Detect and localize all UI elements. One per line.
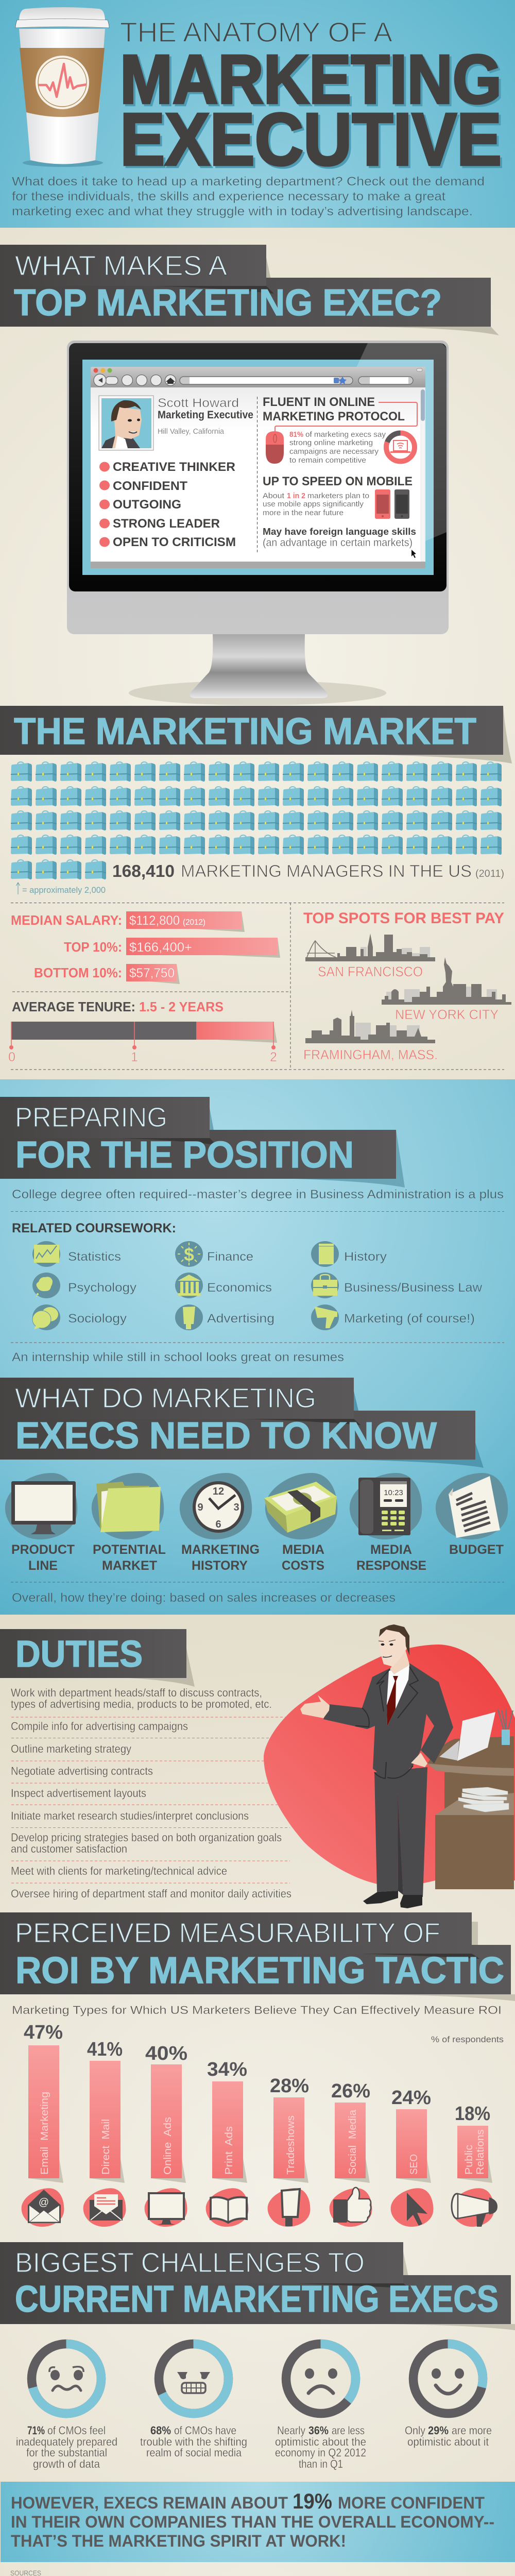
text: challenge three	[275, 2424, 366, 2470]
tactic icons row	[22, 2188, 497, 2227]
icon: clock: 3	[233, 1502, 239, 1513]
intro text: marketing exec and what they struggle with in today’s advertising landscape.	[12, 205, 473, 218]
heading: preparing for the position	[0, 1097, 405, 1188]
bar: public relations 18%: 18%	[455, 2103, 490, 2125]
text: challenge four: Only	[405, 2424, 425, 2437]
bottom 10% bar: $57,750	[129, 966, 175, 980]
bar: print ads 34%	[207, 2059, 247, 2183]
duties list: Inspect advertisement layouts	[11, 1787, 146, 1800]
course: sociology	[32, 1304, 127, 1330]
heading: preparing for the position: PREPARING	[15, 1102, 167, 1133]
label: san francisco: SAN FRANCISCO	[318, 964, 423, 979]
course: finance: $	[184, 1245, 194, 1265]
bar: direct mail 41%	[87, 2039, 125, 2183]
duties list: Negotiate advertising contracts	[11, 1765, 153, 1777]
arm gap	[421, 1714, 434, 1750]
salary bars	[11, 911, 280, 984]
text: challenge two	[140, 2424, 247, 2459]
average tenure chart	[8, 999, 277, 1064]
average tenure chart: 2	[270, 1050, 277, 1064]
red blob behind executive	[264, 1645, 515, 1886]
online marketing block: campaigns are necessary	[289, 447, 379, 456]
knowledge labels: COSTS	[282, 1558, 324, 1573]
callout: marketing spirit: MORE CONFIDENT	[338, 2494, 485, 2512]
icon: coffee cup	[15, 7, 109, 167]
icon: thumbs up	[330, 2188, 372, 2227]
bar: direct mail 41%: Direct Mail	[100, 2119, 112, 2175]
course: advertising: Advertising	[207, 1312, 274, 1326]
tie	[387, 1676, 398, 1726]
text: challenge two: trouble with the shifting	[140, 2435, 247, 2448]
background: cream panel one	[0, 228, 515, 1079]
trousers	[374, 1767, 427, 1897]
course: psychology: Psychology	[68, 1281, 136, 1295]
skyline: framingham	[305, 1010, 435, 1043]
text: challenge one	[16, 2424, 117, 2470]
mobile block: UP TO SPEED ON MOBILE	[263, 474, 413, 488]
intro text	[12, 175, 485, 218]
bar: seo 24%	[391, 2087, 431, 2183]
bar: social media 26%: Social Media	[347, 2109, 358, 2175]
intro text: What does it take to head up a marketing department? Check out the demand	[12, 175, 485, 189]
text: challenge four: optimistic about it	[407, 2435, 489, 2448]
label: new york city: NEW YORK CITY	[395, 1007, 499, 1022]
online marketing block: to remain competitive	[289, 456, 366, 465]
duties list: Compile info for advertising campaigns	[11, 1720, 188, 1733]
course: economics: Economics	[207, 1281, 272, 1295]
note: percent of respondents: % of respondents	[431, 2035, 504, 2044]
laptop	[439, 1712, 495, 1761]
median salary bar: (2012)	[183, 918, 205, 927]
heading: duties	[0, 1629, 195, 1687]
donut: 29% face	[413, 2344, 483, 2413]
title: the anatomy of a: THE ANATOMY OF A	[120, 17, 392, 48]
stat: managers count: MARKETING MANAGERS IN THE US	[181, 861, 472, 880]
icon: megaphone	[452, 2188, 497, 2227]
text: degree note: College degree often required--master’s degree in Business Administration is a plus	[12, 1188, 504, 1201]
heading: perceived measurability of roi	[0, 1912, 515, 2001]
language skills note: May have foreign language skills	[263, 527, 416, 537]
course: business law: Business/Business Law	[344, 1281, 483, 1295]
bar: public relations 18%	[455, 2103, 492, 2183]
traits list: STRONG LEADER	[113, 517, 220, 531]
online marketing block: FLUENT IN ONLINE	[263, 395, 375, 409]
mobile block: marketers plan to	[307, 492, 369, 500]
average tenure chart: 1	[131, 1050, 138, 1064]
subtitle: marketing types: Marketing Types for Which US Marketers Believe They Can Effectively Measure ROI	[12, 2004, 502, 2016]
median salary bar: MEDIAN SALARY:	[11, 912, 122, 928]
pen cup	[498, 1709, 513, 1745]
bar: social media 26%: 26%	[331, 2080, 370, 2102]
knowledge labels: BUDGET	[449, 1543, 504, 1557]
illustration: executive	[300, 1624, 453, 1908]
callout: marketing spirit: IN THEIR OWN COMPANIES THAN THE OVERALL ECONOMY--	[11, 2513, 494, 2531]
traits list: CONFIDENT	[113, 479, 187, 493]
icon: clock: 12	[213, 1486, 224, 1497]
bar: email marketing 47%: 47%	[24, 2022, 63, 2043]
text: challenge two: realm of social media	[146, 2446, 242, 2459]
online marketing block: 81%	[289, 430, 303, 439]
knowledge labels: HISTORY	[192, 1558, 248, 1573]
language skills note	[263, 527, 416, 549]
heading: what makes a top marketing exec: WHAT MAKES A	[15, 250, 227, 281]
knowledge labels	[11, 1543, 504, 1573]
duties list: types of advertising media, products to be promoted, etc.	[11, 1698, 272, 1710]
text: challenge one: 71%	[27, 2424, 45, 2437]
heading: related coursework: RELATED COURSEWORK:	[12, 1221, 176, 1235]
knowledge labels: LINE	[28, 1558, 58, 1573]
name and title: Marketing Executive	[158, 409, 253, 421]
traits list: OUTGOING	[113, 498, 181, 512]
duties list	[11, 1686, 291, 1900]
course: history: History	[344, 1250, 387, 1264]
callout: marketing spirit	[1, 2482, 515, 2562]
skyline: new york city	[382, 957, 511, 1005]
text: challenge two: 68%	[150, 2424, 171, 2437]
bar: email marketing 47%	[24, 2022, 63, 2183]
course: marketing	[311, 1304, 475, 1330]
icon: phones	[375, 489, 409, 519]
shoes	[363, 1891, 422, 1908]
traits list	[99, 460, 236, 549]
illustration: desk	[427, 1709, 514, 1889]
bar: tradeshows 28%	[270, 2075, 309, 2183]
average tenure chart: 0	[8, 1050, 15, 1064]
heading: biggest challenges	[0, 2242, 515, 2330]
text: internship note: An internship while still in school looks great on resumes	[12, 1350, 344, 1364]
icon: open book	[206, 2188, 248, 2227]
text: challenge three: are less	[332, 2424, 365, 2437]
text: challenge one: for the substantial	[26, 2446, 107, 2459]
course: advertising	[175, 1304, 274, 1330]
callout: marketing spirit: HOWEVER, EXECS REMAIN ABOUT	[11, 2494, 288, 2512]
course: economics	[175, 1273, 272, 1298]
heading: what do marketing execs need to know	[0, 1378, 484, 1468]
top 10% bar: $166,400+	[129, 940, 192, 955]
course: business law	[311, 1273, 483, 1298]
bar chart: roi by tactic	[24, 2022, 492, 2183]
bar: online ads 40%: Online Ads	[162, 2117, 174, 2175]
knowledge labels: MARKETING	[181, 1543, 260, 1557]
course: statistics	[32, 1241, 121, 1267]
text: challenge one: growth of data	[33, 2458, 100, 2470]
knowledge labels: PRODUCT	[11, 1543, 75, 1557]
icon: desk phone: 10:23	[384, 1488, 403, 1497]
shirt	[387, 1665, 409, 1726]
knowledge labels: POTENTIAL	[93, 1543, 166, 1557]
course: finance: Finance	[207, 1250, 253, 1264]
heading: the marketing market: THE MARKETING MARKET	[14, 711, 476, 752]
knowledge labels: MEDIA	[282, 1543, 324, 1557]
skyline: san francisco	[305, 934, 435, 961]
icon: donut with laptop	[386, 433, 415, 462]
heading: biggest challenges: BIGGEST CHALLENGES TO	[15, 2247, 365, 2278]
text: challenge three: than in Q1	[299, 2458, 343, 2470]
mobile block: About	[263, 492, 285, 500]
icon: billboard	[268, 2188, 310, 2227]
name and title	[158, 396, 253, 436]
duties list: Meet with clients for marketing/technical advice	[11, 1865, 227, 1877]
bar: social media 26%	[331, 2080, 370, 2183]
icon: clock: 9	[197, 1502, 203, 1513]
knowledge labels: MEDIA	[370, 1543, 412, 1557]
heading: preparing for the position: FOR THE POSITION	[15, 1134, 354, 1176]
hands	[300, 1695, 330, 1718]
course: marketing: Marketing (of course!)	[344, 1312, 475, 1326]
pictogram: briefcases	[11, 762, 502, 879]
icon: budget document	[436, 1473, 508, 1539]
course: history	[311, 1241, 387, 1267]
books	[458, 1787, 509, 1812]
heading: perceived measurability of roi: PERCEIVED MEASURABILITY OF	[15, 1918, 440, 1948]
icon: cursor arrow	[391, 2188, 433, 2227]
traits list: OPEN TO CRITICISM	[113, 535, 236, 549]
online marketing block	[263, 395, 417, 465]
bar: tradeshows 28%: 28%	[270, 2075, 309, 2097]
browser window	[91, 367, 425, 568]
label: framingham: FRAMINGHAM, MASS.	[303, 1047, 438, 1062]
bar: tradeshows 28%: Tradeshows	[285, 2115, 297, 2175]
name and title: Scott Howard	[158, 396, 239, 410]
bar: public relations 18%: Relations	[475, 2129, 486, 2175]
heading: what do marketing execs need to know: EXECS NEED TO KNOW	[15, 1415, 437, 1456]
bottom 10% bar: BOTTOM 10%:	[34, 965, 122, 980]
name and title: Hill Valley, California	[158, 427, 225, 436]
online marketing block: MARKETING PROTOCOL	[263, 410, 405, 423]
donut: 68% face	[159, 2344, 229, 2413]
icon: desk phone	[350, 1473, 422, 1539]
mobile block: 1 in 2	[287, 492, 305, 500]
text: challenge one: of CMOs feel	[47, 2424, 106, 2437]
icon: product line monitor	[5, 1473, 77, 1539]
bar: print ads 34%: 34%	[207, 2059, 247, 2080]
average tenure chart: AVERAGE TENURE:	[12, 999, 135, 1014]
legend: briefcase value: = approximately 2,000	[22, 885, 106, 895]
online marketing block: strong online marketing	[289, 438, 373, 447]
text: challenge four	[405, 2424, 492, 2448]
mobile block: more in the near future	[263, 509, 344, 517]
icon: potential market folder	[92, 1473, 164, 1539]
icon: mouse	[266, 431, 284, 464]
icon: online monitor	[145, 2188, 187, 2227]
mobile block	[263, 474, 413, 519]
traits list: CREATIVE THINKER	[113, 460, 235, 474]
neck and face	[390, 1646, 409, 1674]
donut: 36% face	[286, 2344, 355, 2413]
heading: perceived measurability of roi: ROI BY MARKETING TACTIC	[15, 1950, 504, 1991]
bottom 10% bar	[34, 964, 180, 984]
heading: what makes a top marketing exec	[0, 245, 499, 335]
callout: marketing spirit: THAT’S THE MARKETING SPIRIT AT WORK!	[11, 2532, 346, 2550]
bar: print ads 34%: Print Ads	[224, 2126, 235, 2175]
text: challenge one: inadequately prepared	[16, 2435, 117, 2448]
intro text: for these individuals, the skills and experience necessary to make a great	[12, 190, 445, 204]
profile photo	[99, 396, 153, 450]
background: blue panel	[0, 1079, 515, 1615]
top 10% bar	[64, 938, 280, 958]
duties list: Outline marketing strategy	[11, 1742, 131, 1755]
icon: email envelope	[22, 2188, 64, 2227]
duties list: Develop pricing strategies based on both organization goals	[11, 1831, 282, 1844]
bar: email marketing 47%: Email Marketing	[39, 2092, 50, 2175]
bar: online ads 40%: 40%	[145, 2043, 187, 2064]
top 10% bar: TOP 10%:	[64, 939, 122, 955]
course: psychology	[32, 1273, 136, 1298]
stat: managers count: (2011)	[475, 868, 504, 879]
heading: duties: DUTIES	[15, 1634, 143, 1675]
duties list: Initiate market research studies/interpret conclusions	[11, 1809, 249, 1822]
median salary bar: $112,800	[129, 913, 180, 928]
icon: direct mail	[83, 2188, 126, 2227]
bar: public relations 18%: Public	[464, 2145, 475, 2175]
course: finance	[175, 1241, 253, 1267]
bar: direct mail 41%: 41%	[87, 2039, 123, 2060]
bar: online ads 40%	[145, 2043, 187, 2183]
background: footer panel	[0, 2562, 515, 2576]
knowledge labels: RESPONSE	[356, 1558, 426, 1573]
jacket	[323, 1663, 453, 1780]
course: statistics: Statistics	[68, 1250, 121, 1264]
stat: managers count: 168,410	[112, 861, 175, 880]
icon: email envelope: @	[39, 2197, 49, 2208]
heading: what makes a top marketing exec: TOP MARKETING EXEC?	[14, 282, 442, 324]
text: challenge three: optimistic about the	[275, 2435, 366, 2448]
duties list: and customer satisfaction	[11, 1842, 127, 1855]
icon: stack of money	[264, 1473, 337, 1539]
coursework grid	[32, 1241, 483, 1330]
callout: marketing spirit: 19%	[293, 2489, 332, 2513]
heading: what do marketing execs need to know: WHAT DO MARKETING	[15, 1383, 316, 1414]
mobile block: use mobile apps significantly	[263, 500, 364, 509]
text: challenge four: 29%	[428, 2424, 449, 2437]
heading: the marketing market	[0, 706, 512, 764]
text: challenge three: Nearly	[277, 2424, 305, 2437]
median salary bar	[11, 911, 245, 932]
text: challenge three: economy in Q2 2012	[275, 2446, 366, 2459]
text: overall note: Overall, how they’re doing: based on sales increases or decreases	[12, 1591, 396, 1605]
course: sociology: Sociology	[68, 1312, 127, 1326]
average tenure chart: 1.5 - 2 YEARS	[139, 999, 224, 1014]
icon: clock: 6	[215, 1519, 221, 1530]
icon: clock	[180, 1473, 252, 1539]
text: challenge two: of CMOs have	[174, 2424, 236, 2437]
donut: 71% face	[32, 2344, 101, 2413]
background: cream panel two	[0, 1615, 515, 2482]
online marketing block: of marketing execs say	[305, 430, 386, 439]
heading: top spots: TOP SPOTS FOR BEST PAY	[303, 910, 504, 927]
background: header panel	[0, 0, 515, 228]
icon: cursor	[411, 550, 416, 558]
knowledge icons row	[5, 1473, 508, 1539]
text: challenge four: are more	[452, 2424, 492, 2437]
text: challenge three: 36%	[308, 2424, 329, 2437]
language skills note: (an advantage in certain markets)	[263, 537, 413, 549]
bar: seo 24%: 24%	[391, 2087, 431, 2109]
knowledge labels: MARKET	[102, 1558, 157, 1573]
bar: seo 24%: SEO	[408, 2154, 420, 2175]
icon: desktop monitor	[67, 341, 449, 705]
duties list: Work with department heads/staff to discuss contracts,	[11, 1686, 262, 1699]
duties list: Oversee hiring of department staff and monitor daily activities	[11, 1887, 291, 1900]
